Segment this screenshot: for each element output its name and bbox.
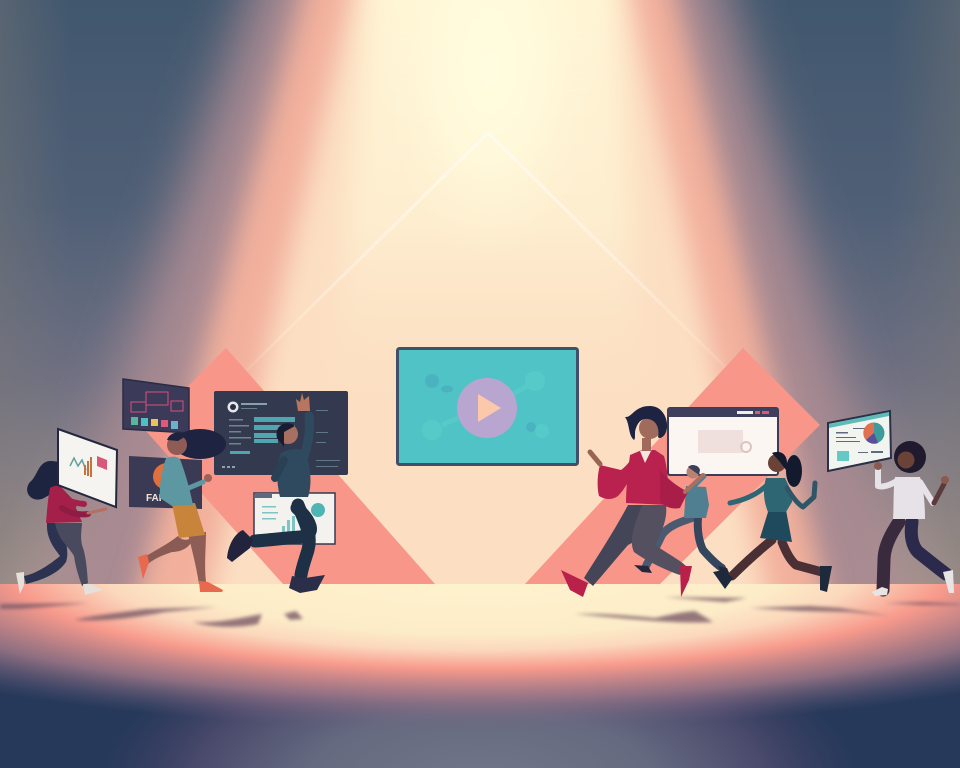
screen: far right tilted report <box>828 411 891 471</box>
screen: right browser window <box>668 408 778 475</box>
spotlight beam <box>64 0 894 584</box>
wall background <box>0 0 960 584</box>
person: jumping man in navy <box>227 393 325 593</box>
person: small figure in blue <box>634 465 730 575</box>
person: woman with afro and white top <box>872 441 954 596</box>
screen: white report card <box>254 493 335 544</box>
screen: floating icons dark <box>123 379 189 433</box>
person: ponytail runner <box>713 452 832 592</box>
stage floor <box>0 584 960 768</box>
floor shadows <box>0 597 960 627</box>
pink diamond left <box>145 348 435 584</box>
person: woman with orange skirt <box>138 429 226 592</box>
play button <box>457 378 517 438</box>
screen: large dark dashboard <box>214 391 348 475</box>
pink diamond right <box>525 348 820 584</box>
video player <box>398 348 578 464</box>
pyramid outline <box>245 133 730 372</box>
screen: dark logo card <box>129 456 202 509</box>
screen: dark logo card: FAP <box>146 493 166 504</box>
person: woman in crimson sweater <box>561 406 703 597</box>
screen: tilted white chart <box>58 429 117 507</box>
person: woman in red with white screen <box>16 429 117 595</box>
